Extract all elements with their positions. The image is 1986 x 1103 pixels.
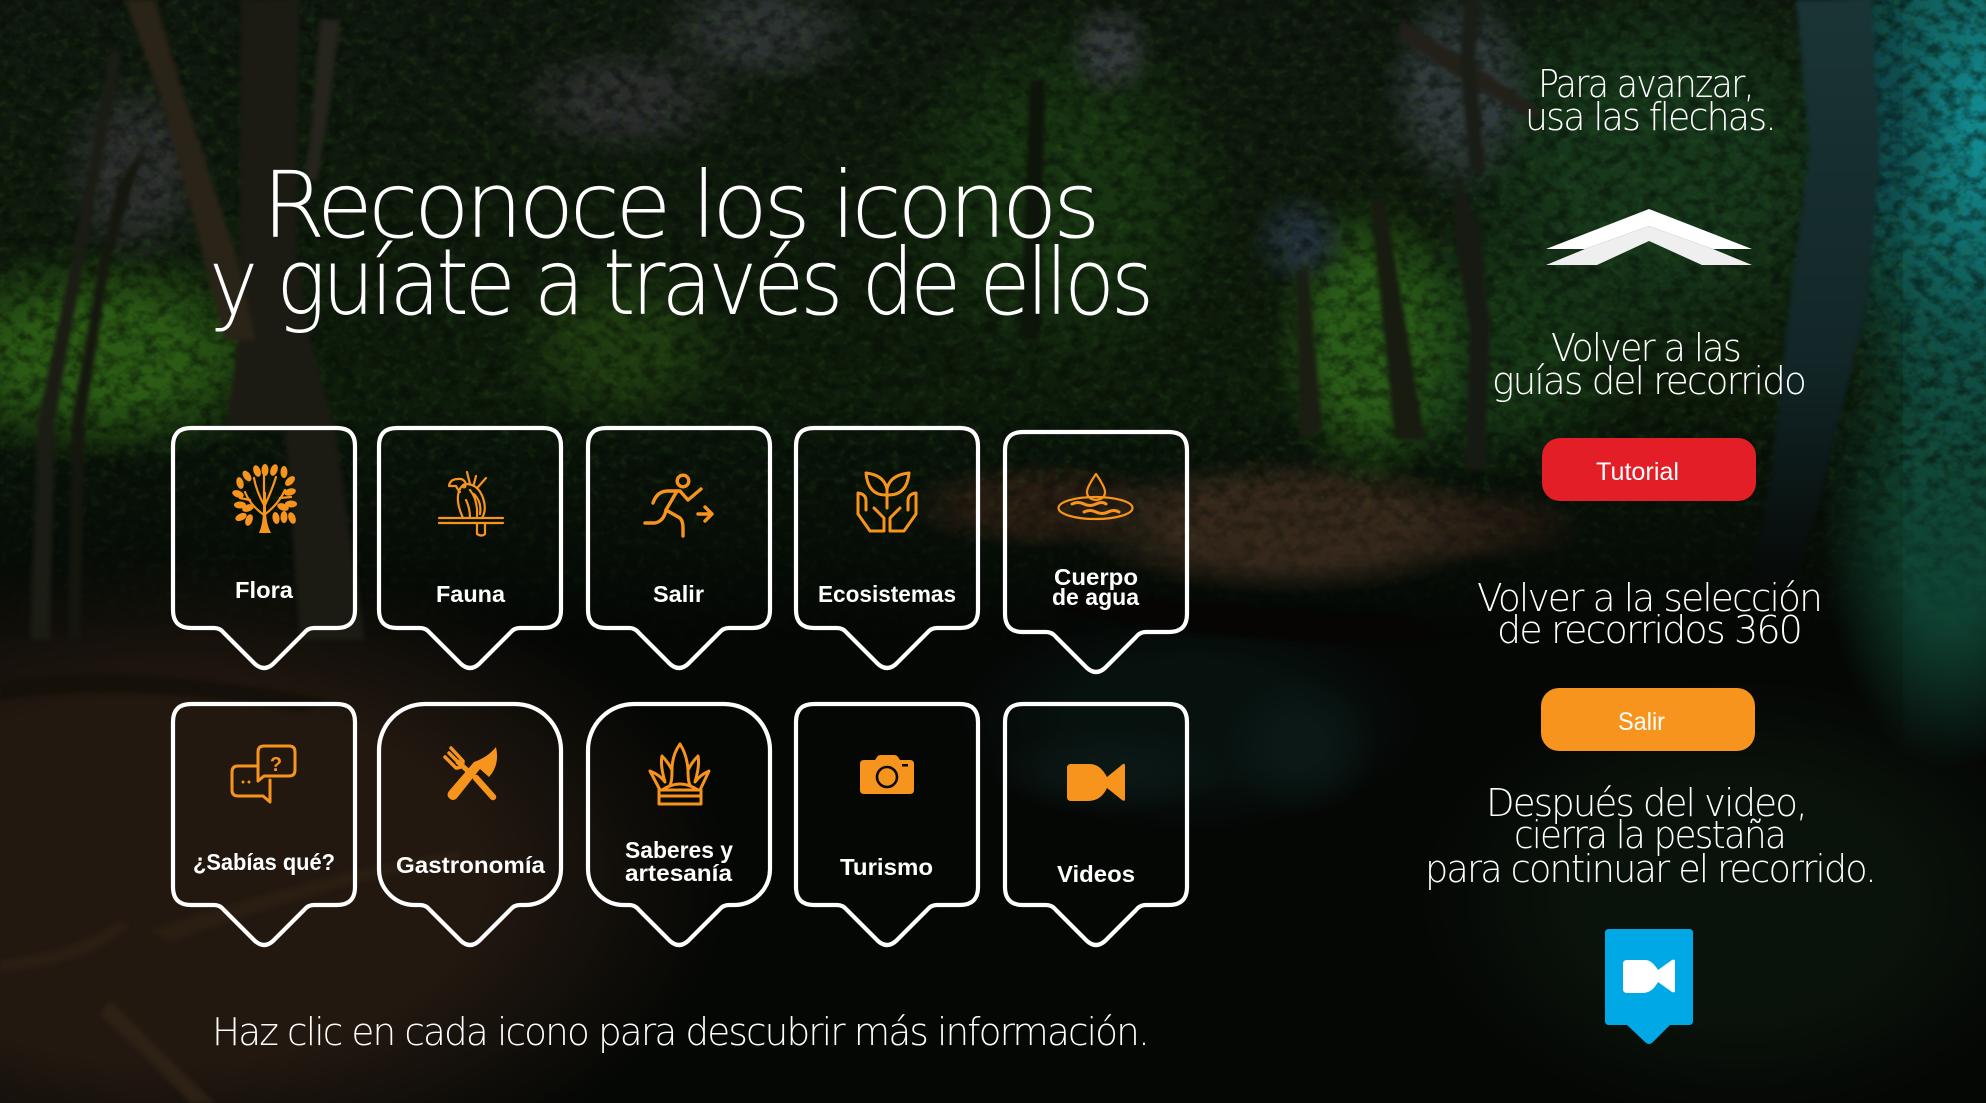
pin: Salir [588, 428, 770, 668]
text: arrows hint [1525, 62, 1775, 139]
pin: Sabías qué [173, 704, 355, 945]
icon: speech bubbles [232, 746, 295, 802]
button: Tutorial [1542, 438, 1756, 501]
pin: Fauna [379, 428, 561, 668]
label: de agua [1052, 584, 1139, 610]
icon: fork and knife [445, 747, 497, 800]
label: Fauna [436, 581, 505, 607]
label: artesanía [625, 860, 732, 886]
pin: Videos [1005, 704, 1187, 945]
button: Tutorial: Tutorial [1596, 458, 1679, 486]
text: arrows hint: Para avanzar, [1538, 62, 1753, 106]
text: exit hint: de recorridos 360 [1497, 608, 1801, 652]
button: Salir: Salir [1618, 708, 1665, 736]
icon: speech bubbles: ? [270, 754, 282, 776]
label: Saberes y [625, 837, 733, 863]
title: y guíate a través de ellos [209, 229, 1150, 336]
icon: tree [231, 463, 297, 533]
icon: video camera [1067, 764, 1125, 801]
pin: Cuerpo de agua [1005, 432, 1187, 672]
text: video hint: para continuar el recorrido. [1425, 847, 1875, 891]
icon: feather headdress [650, 744, 709, 804]
text: exit hint [1477, 576, 1821, 652]
icon: runner with arrow [645, 475, 712, 536]
pin: Saberes y artesanía [588, 704, 770, 945]
text: video hint: cierra la pestaña [1514, 813, 1785, 857]
instruction text: Haz clic en cada icono para descubrir más información. [212, 1010, 1148, 1054]
text: tutorial hint: Volver a las [1551, 326, 1740, 370]
label: Videos [1057, 861, 1135, 887]
title: Reconoce los iconos [262, 152, 1096, 259]
label: Turismo [840, 854, 933, 880]
pin: Gastronomía [379, 704, 561, 945]
pin: Turismo [796, 704, 978, 945]
label: Flora [235, 577, 293, 603]
label: Ecosistemas [818, 581, 956, 607]
text: tutorial hint [1492, 326, 1805, 403]
pin: Flora [173, 428, 355, 668]
label: ¿Sabías qué? [193, 849, 335, 875]
button: Salir [1541, 688, 1755, 751]
text: tutorial hint: guías del recorrido [1492, 359, 1805, 403]
icon: water drop [1058, 474, 1132, 519]
icon grid [173, 428, 1187, 945]
pin: Ecosistemas [796, 428, 978, 668]
text: video hint: Después del video, [1486, 781, 1806, 825]
icon: hands and sprout [858, 473, 916, 531]
icon: parrot on perch [439, 472, 503, 536]
label: Gastronomía [396, 852, 545, 878]
icon: up arrow [1546, 209, 1752, 265]
icon: blue video pin [1605, 929, 1693, 1044]
label: Salir [653, 581, 704, 607]
text: exit hint: Volver a la selección [1477, 576, 1821, 620]
text: video hint [1425, 781, 1875, 891]
label [625, 837, 733, 886]
label: Cuerpo [1054, 564, 1138, 590]
right column [1425, 62, 1875, 1044]
icon: camera [860, 755, 914, 794]
text: arrows hint: usa las flechas. [1525, 95, 1775, 139]
title [209, 152, 1150, 336]
label [1052, 564, 1139, 610]
